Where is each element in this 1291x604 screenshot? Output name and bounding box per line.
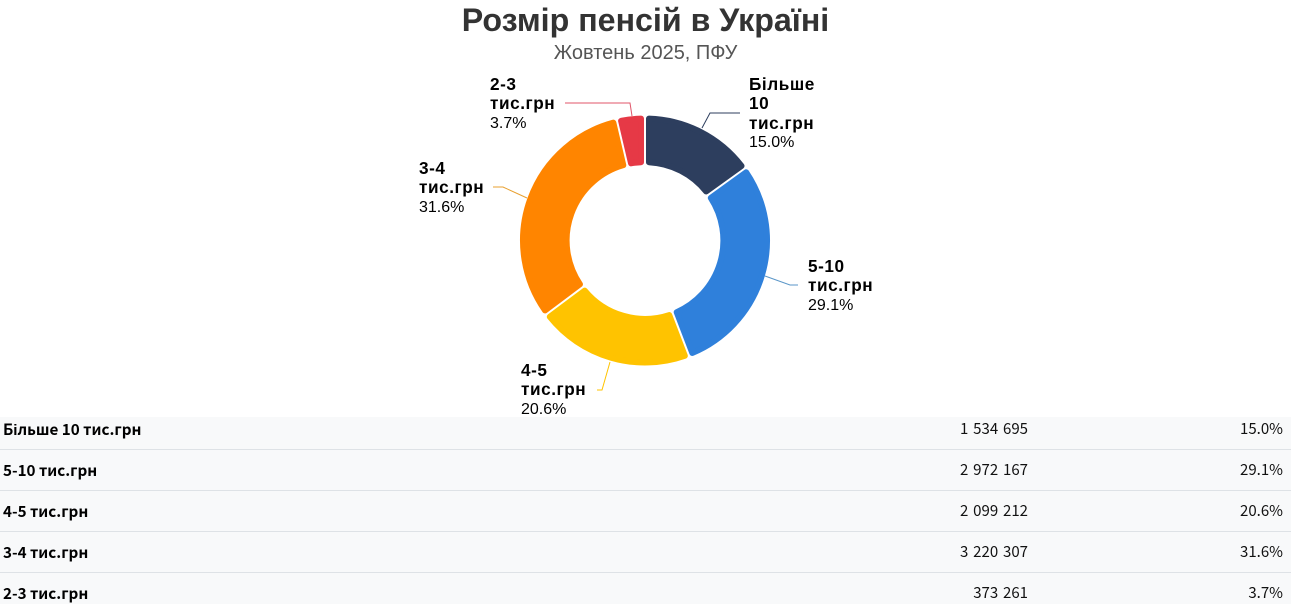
label: 5-10k: 29.1%	[808, 297, 853, 314]
leader line: 2-3k	[565, 103, 632, 116]
label: 3-4k: 31.6%	[419, 199, 464, 216]
row: more than 10k	[0, 417, 1291, 450]
segment: 4-5k	[550, 291, 685, 363]
label: more than 10k: Більше	[749, 74, 815, 94]
subtitle: Жовтень 2025, ПФУ	[554, 42, 737, 64]
leader line: 3-4k	[493, 187, 527, 198]
title: Розмір пенсій в Україні	[462, 2, 829, 38]
label: more than 10k: тис.грн	[749, 113, 814, 133]
row: 5-10k: 2 972 167	[960, 459, 1028, 480]
row: 5-10k: 29.1%	[1240, 459, 1283, 480]
row: 2-3k: 2-3 тис.грн	[3, 582, 88, 604]
label: 2-3k	[490, 74, 555, 132]
row: more than 10k: 15.0%	[1240, 418, 1283, 439]
label: 4-5k	[521, 360, 586, 418]
leader line: more than 10k	[702, 113, 740, 128]
row: 2-3k: 3.7%	[1248, 582, 1283, 603]
leader line: 4-5k	[597, 362, 610, 390]
row: 2-3k	[0, 573, 1291, 604]
label: 5-10k	[808, 256, 873, 314]
label: 2-3k: 2-3	[490, 74, 516, 94]
row: 5-10k	[0, 450, 1291, 491]
row: 4-5k: 4-5 тис.грн	[3, 500, 88, 522]
segment: 5-10k	[677, 172, 767, 353]
label: 5-10k: тис.грн	[808, 275, 873, 295]
leader line: 5-10k	[765, 276, 798, 285]
row: 4-5k	[0, 491, 1291, 532]
row: more than 10k: 1 534 695	[960, 418, 1028, 439]
row: 3-4k	[0, 532, 1291, 573]
segment: more than 10k	[649, 119, 742, 191]
row: 3-4k: 3-4 тис.грн	[3, 541, 88, 563]
label: 5-10k: 5-10	[808, 256, 845, 276]
label: 4-5k: 4-5	[521, 360, 548, 380]
segment: 3-4k	[523, 123, 623, 310]
label: 3-4k	[419, 158, 484, 216]
label: more than 10k: 10	[749, 93, 769, 113]
row: 5-10k: 5-10 тис.грн	[3, 459, 97, 481]
row: more than 10k: Більше 10 тис.грн	[3, 418, 141, 440]
segment: 2-3k	[621, 119, 641, 163]
label: 2-3k: 3.7%	[490, 115, 526, 132]
row: 3-4k: 3 220 307	[960, 541, 1028, 562]
label: 3-4k: тис.грн	[419, 177, 484, 197]
label: more than 10k	[749, 74, 815, 151]
label: 3-4k: 3-4	[419, 158, 446, 178]
row: 3-4k: 31.6%	[1240, 541, 1283, 562]
donut chart	[419, 74, 873, 417]
row: 2-3k: 373 261	[973, 582, 1028, 603]
data table	[0, 418, 1291, 604]
label: more than 10k: 15.0%	[749, 134, 794, 151]
row: 4-5k: 20.6%	[1240, 500, 1283, 521]
label: 2-3k: тис.грн	[490, 93, 555, 113]
row: 4-5k: 2 099 212	[960, 500, 1028, 521]
label: 4-5k: тис.грн	[521, 379, 586, 399]
